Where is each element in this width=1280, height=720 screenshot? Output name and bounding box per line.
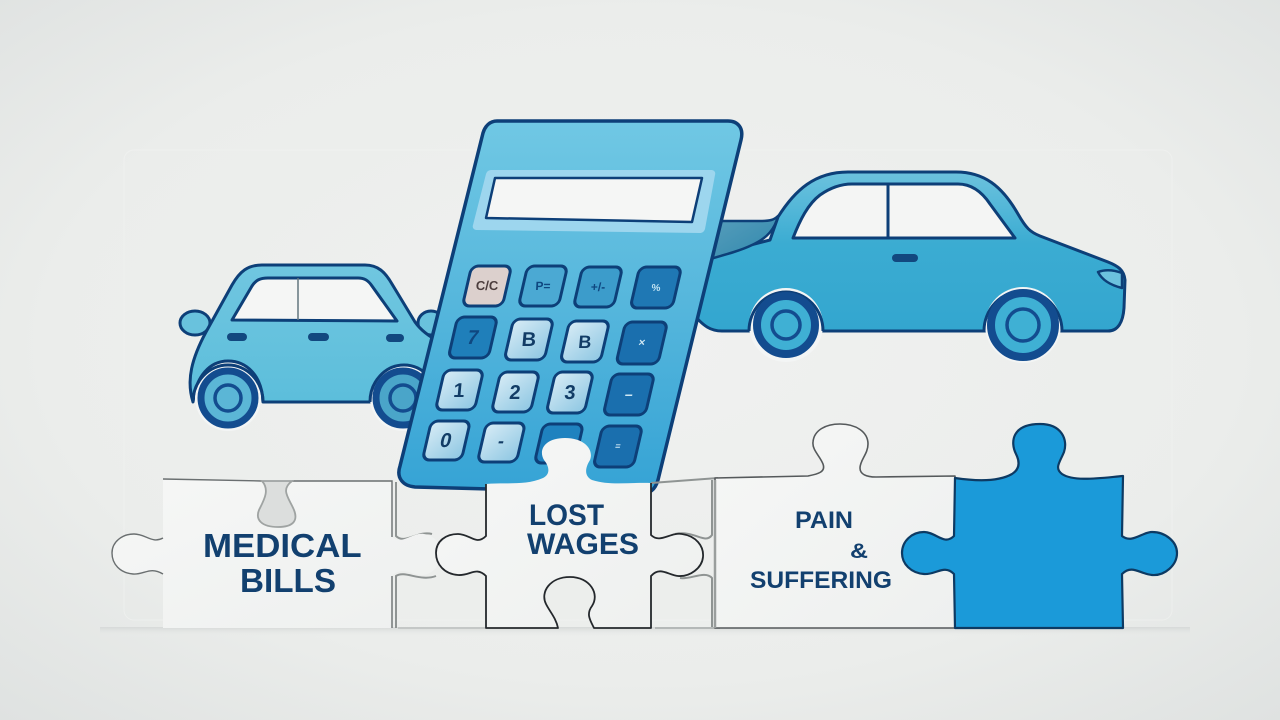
lost wages shape xyxy=(436,438,703,628)
key: 7 xyxy=(448,317,498,358)
key: equals: = xyxy=(614,441,622,451)
right car xyxy=(690,172,1125,363)
left car front wheel xyxy=(193,365,263,431)
key: 0 xyxy=(422,421,470,460)
pain and suffering label: & xyxy=(850,540,868,563)
right car front wheel xyxy=(984,287,1062,363)
puzzle outlines behind pieces xyxy=(396,478,720,628)
left car xyxy=(180,265,444,431)
key: function 1 xyxy=(518,266,568,306)
key: function 3: % xyxy=(651,283,661,294)
key: decimal xyxy=(477,423,525,462)
calculator keys xyxy=(422,266,682,467)
calculator display xyxy=(486,178,702,222)
right car folded flap xyxy=(703,216,778,261)
key: minus: – xyxy=(623,387,635,403)
right car window xyxy=(793,184,1015,238)
right car door handle xyxy=(892,254,918,262)
left car mirrors xyxy=(180,311,444,335)
key: 9 xyxy=(560,321,610,362)
left car rear wheel xyxy=(370,365,438,431)
key: hidden xyxy=(534,424,583,463)
key: clear: C/C xyxy=(475,278,499,293)
puzzle piece: blue xyxy=(902,424,1177,628)
key: clear xyxy=(462,266,512,306)
key: multiply xyxy=(616,322,668,364)
key: 1: 1 xyxy=(452,380,465,402)
medical bills label: MEDICAL xyxy=(203,527,361,564)
medical bills shape xyxy=(112,479,441,628)
calculator body xyxy=(399,121,742,493)
left car door handles xyxy=(227,333,404,342)
right car body xyxy=(690,172,1125,331)
puzzle piece: pain and suffering xyxy=(715,424,955,628)
pain and suffering shape xyxy=(715,424,955,628)
key: function 2 xyxy=(573,267,623,307)
medical bills edges xyxy=(112,479,392,628)
key: 2 xyxy=(491,372,540,412)
key: multiply: × xyxy=(637,337,647,349)
key: 8 xyxy=(504,319,554,360)
key: 1 xyxy=(435,370,484,410)
key: minus xyxy=(603,374,655,415)
left car window xyxy=(232,278,397,321)
puzzle piece: medical bills xyxy=(112,479,441,628)
key: 9: B xyxy=(578,332,592,352)
key: decimal: - xyxy=(496,430,507,451)
key: equals xyxy=(593,426,643,467)
lost wages label: WAGES xyxy=(527,528,639,561)
lost wages label: LOST xyxy=(529,499,604,532)
calculator xyxy=(399,121,742,493)
medical bills top notch xyxy=(258,481,295,527)
key: function 2: +/- xyxy=(590,280,606,294)
lost wages edges xyxy=(436,483,703,628)
puzzle piece: lost wages xyxy=(436,438,703,628)
pain and suffering label: PAIN xyxy=(795,507,853,534)
key: 0: 0 xyxy=(438,430,454,452)
key: 3 xyxy=(546,372,594,413)
pain and suffering label: SUFFERING xyxy=(750,567,892,594)
right car rear wheel xyxy=(749,288,823,362)
key: 8: B xyxy=(521,329,537,351)
key: function 3 xyxy=(630,267,682,308)
key: 3: 3 xyxy=(563,382,576,404)
key: 7: 7 xyxy=(465,327,481,349)
calculator display surround xyxy=(473,170,715,233)
right car headlight xyxy=(1098,270,1122,288)
key: 2: 2 xyxy=(508,382,521,404)
left car body xyxy=(190,265,440,402)
medical bills label: BILLS xyxy=(240,562,336,599)
key: function 1: P= xyxy=(535,279,551,293)
